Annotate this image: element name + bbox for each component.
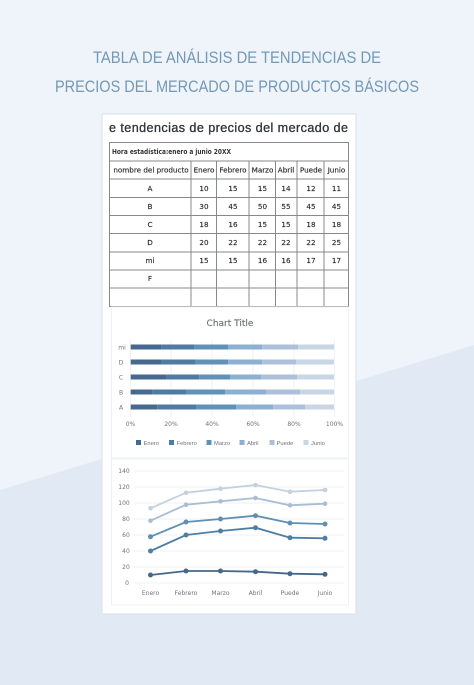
- bar axis labels: 40%: [205, 421, 219, 428]
- data table: 15: [281, 220, 291, 229]
- bar axis labels: 20%: [164, 421, 178, 428]
- bar legend: Febrero: [176, 441, 197, 447]
- data table: Junio: [327, 166, 345, 174]
- data table: 18: [199, 220, 209, 229]
- bar legend: [136, 440, 325, 447]
- data table: Puede: [300, 166, 323, 174]
- title: PRECIOS DEL MERCADO DE PRODUCTOS BÁSICOS: [55, 77, 419, 96]
- bar axis labels: A: [119, 404, 124, 412]
- data table: 50: [258, 202, 267, 211]
- data table: 15: [258, 220, 267, 229]
- data table: 15: [258, 184, 267, 193]
- line axis labels: 100: [118, 500, 130, 507]
- chart title: Chart Title: [207, 319, 254, 329]
- bar axis labels: B: [119, 390, 123, 396]
- bar: C: [131, 374, 334, 380]
- data table: 55: [281, 202, 291, 211]
- data table: 22: [281, 238, 291, 247]
- data table: F: [148, 274, 152, 283]
- data table: 17: [306, 256, 316, 265]
- data table: 16: [258, 256, 267, 265]
- data table: 22: [258, 238, 267, 247]
- line axis labels: [118, 468, 333, 597]
- data table: A: [148, 184, 153, 193]
- bar axis labels: D: [119, 360, 124, 366]
- data table: 17: [332, 256, 341, 265]
- bar: mi: [131, 344, 334, 350]
- stacked bar chart: [112, 307, 348, 458]
- bar axis labels: [118, 344, 343, 428]
- title: TABLA DE ANÁLISIS DE TENDENCIAS DE: [93, 48, 381, 67]
- line axis labels: Junio: [317, 590, 333, 597]
- line axis labels: Abril: [249, 590, 263, 597]
- data table: 25: [332, 238, 341, 247]
- bar axis labels: C: [119, 374, 123, 382]
- bar: B: [131, 390, 334, 394]
- data table: 45: [228, 202, 238, 211]
- line axis labels: 0: [125, 580, 129, 587]
- spreadsheet heading: e tendencias de precios del mercado de: [109, 121, 348, 135]
- data table: 11: [332, 184, 341, 193]
- data table: 15: [199, 256, 209, 265]
- line axis labels: 20: [122, 564, 130, 571]
- series: Marzo: [148, 514, 327, 539]
- data table: Enero: [194, 166, 214, 174]
- data table: C: [147, 220, 153, 229]
- line axis labels: 120: [118, 484, 130, 491]
- data table: Hora estadística:enero a junio 20XX: [112, 148, 231, 156]
- bar legend: Marzo: [214, 441, 230, 447]
- data table: 10: [199, 184, 209, 193]
- data table: Marzo: [252, 166, 273, 174]
- series: Enero: [148, 569, 327, 577]
- data table: 20: [199, 238, 209, 247]
- bar axis labels: 0%: [126, 421, 136, 428]
- data table: 16: [281, 256, 291, 265]
- line axis labels: 140: [118, 468, 130, 475]
- data table: mi: [146, 256, 155, 265]
- data table: 15: [228, 184, 238, 193]
- line axis labels: 80: [122, 516, 130, 523]
- bar legend: Junio: [311, 441, 325, 447]
- bar: A: [131, 404, 334, 410]
- data table: 30: [199, 202, 209, 211]
- line axis labels: Puede: [281, 590, 300, 597]
- panel: spreadsheet card: [102, 114, 356, 614]
- data table: 15: [228, 256, 238, 265]
- line axis labels: 40: [122, 548, 130, 555]
- data table: 14: [281, 184, 291, 193]
- title: [55, 48, 419, 96]
- bar axis labels: 100%: [326, 421, 343, 428]
- data table: 18: [332, 220, 341, 229]
- data table: Febrero: [219, 166, 247, 174]
- series: Junio: [149, 483, 327, 510]
- data table: 18: [306, 220, 316, 229]
- line axis labels: Febrero: [175, 590, 198, 597]
- data table: 45: [332, 202, 341, 211]
- data table: D: [147, 238, 153, 247]
- bar axis labels: 80%: [287, 421, 301, 428]
- bar axis labels: 60%: [246, 421, 260, 428]
- bar axis labels: mi: [118, 344, 126, 352]
- line axis labels: Marzo: [211, 590, 230, 597]
- line axis labels: Enero: [142, 590, 159, 597]
- line axis labels: 60: [122, 532, 130, 539]
- data table: 16: [228, 220, 238, 229]
- data table: Abril: [278, 166, 294, 174]
- series: Febrero: [148, 526, 327, 553]
- data table: [110, 142, 348, 306]
- line chart: [112, 459, 348, 605]
- series: Puede: [149, 496, 327, 522]
- data table: 22: [228, 238, 238, 247]
- data table: 22: [306, 238, 316, 247]
- bar legend: Abril: [247, 441, 259, 447]
- data table: 45: [306, 202, 316, 211]
- bar legend: Puede: [276, 441, 293, 447]
- bar legend: Enero: [144, 441, 159, 447]
- bar: D: [131, 360, 334, 364]
- data table: B: [148, 202, 153, 211]
- data table: nombre del producto: [113, 166, 189, 174]
- data table: 12: [306, 184, 316, 193]
